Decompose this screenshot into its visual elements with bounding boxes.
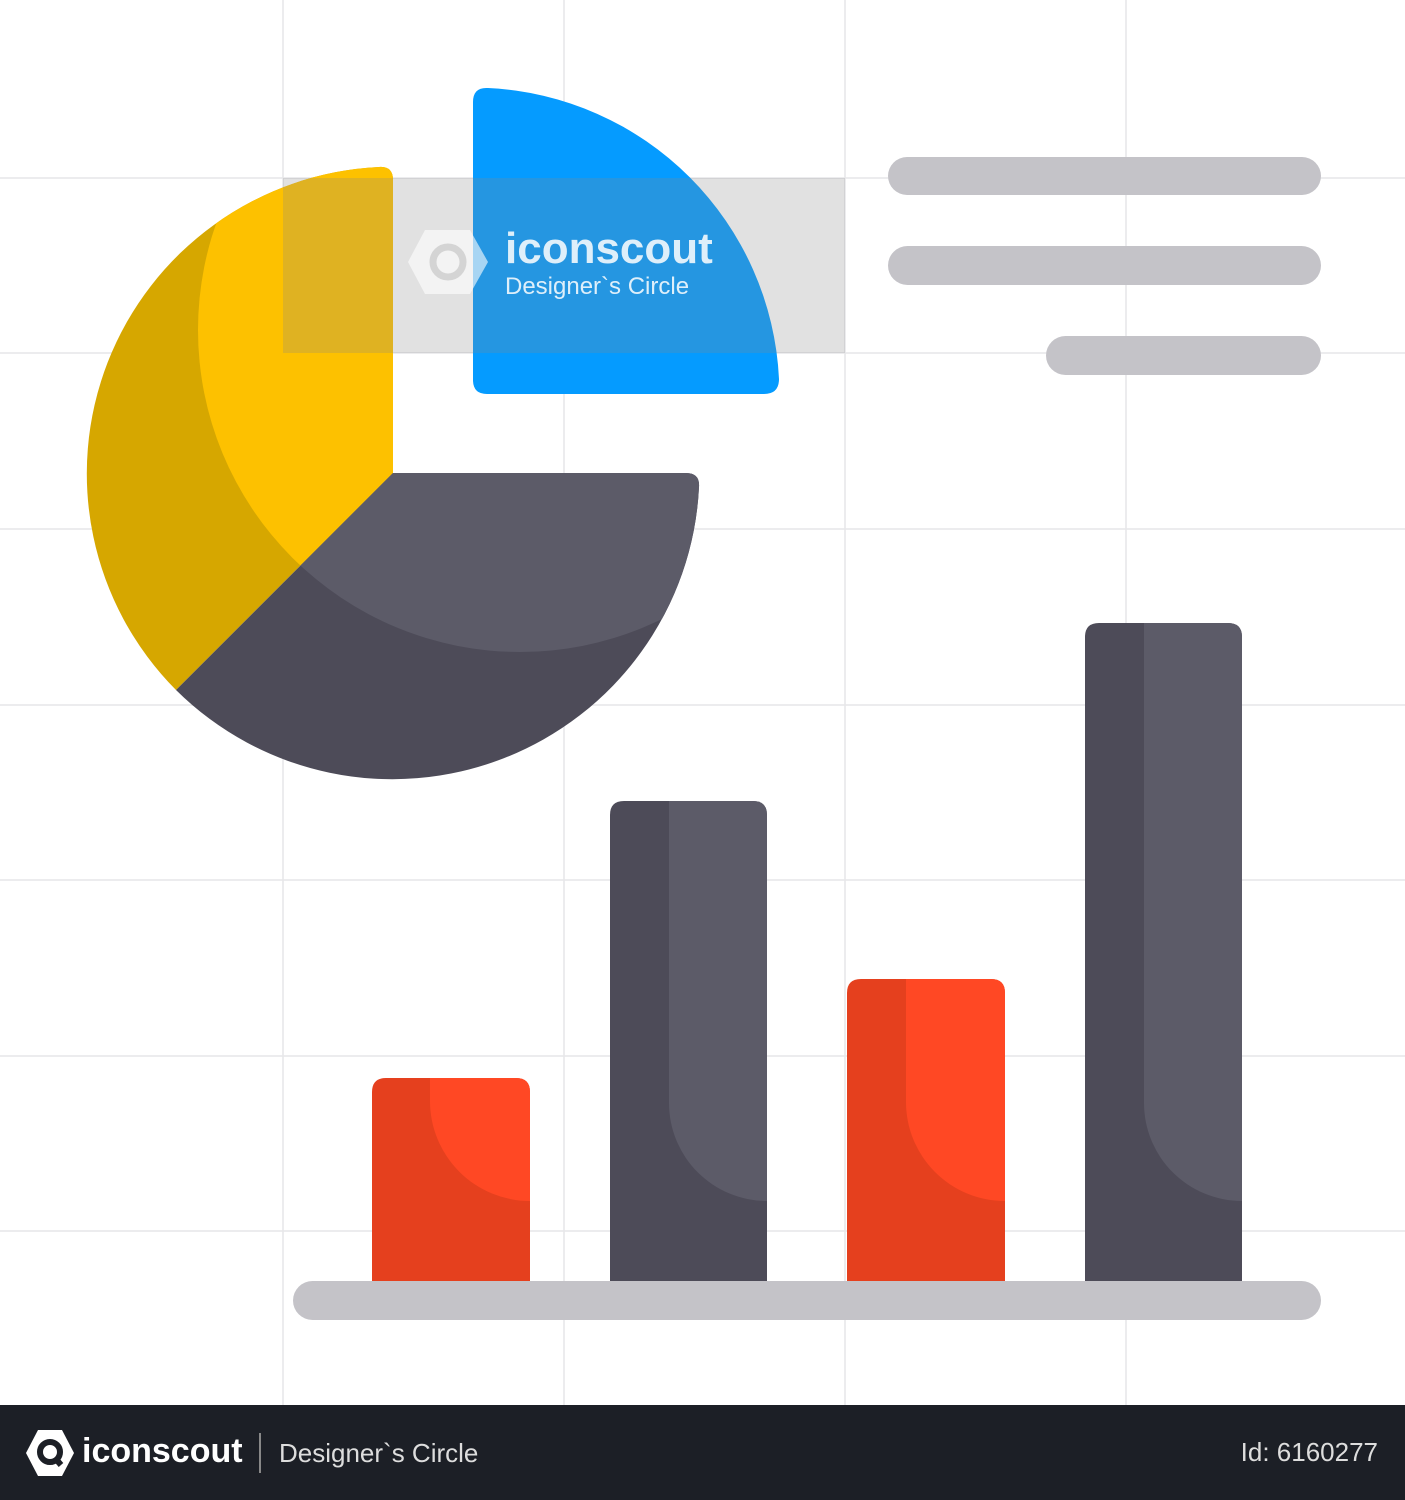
watermark band: iconscout [505, 224, 713, 273]
pie slice: dark [176, 473, 699, 779]
bar 1 red [372, 1078, 530, 1281]
footer author: Designer`s Circle [279, 1438, 478, 1468]
pie chart [87, 88, 779, 779]
footer [0, 1405, 1405, 1500]
pie slice: blue [473, 88, 779, 394]
footer brand: iconscout [82, 1432, 243, 1470]
footer logo [26, 1430, 74, 1476]
baseline [293, 1281, 1321, 1320]
bar 4 dark [1085, 623, 1242, 1281]
watermark band [283, 178, 845, 353]
bar chart [293, 623, 1321, 1320]
watermark band: Designer`s Circle [505, 273, 689, 300]
footer id: Id: 6160277 [1241, 1437, 1378, 1467]
text lines [888, 157, 1321, 375]
bar 3 red [847, 979, 1005, 1281]
pie slice: yellow [87, 167, 393, 690]
bar 2 dark [610, 801, 767, 1281]
